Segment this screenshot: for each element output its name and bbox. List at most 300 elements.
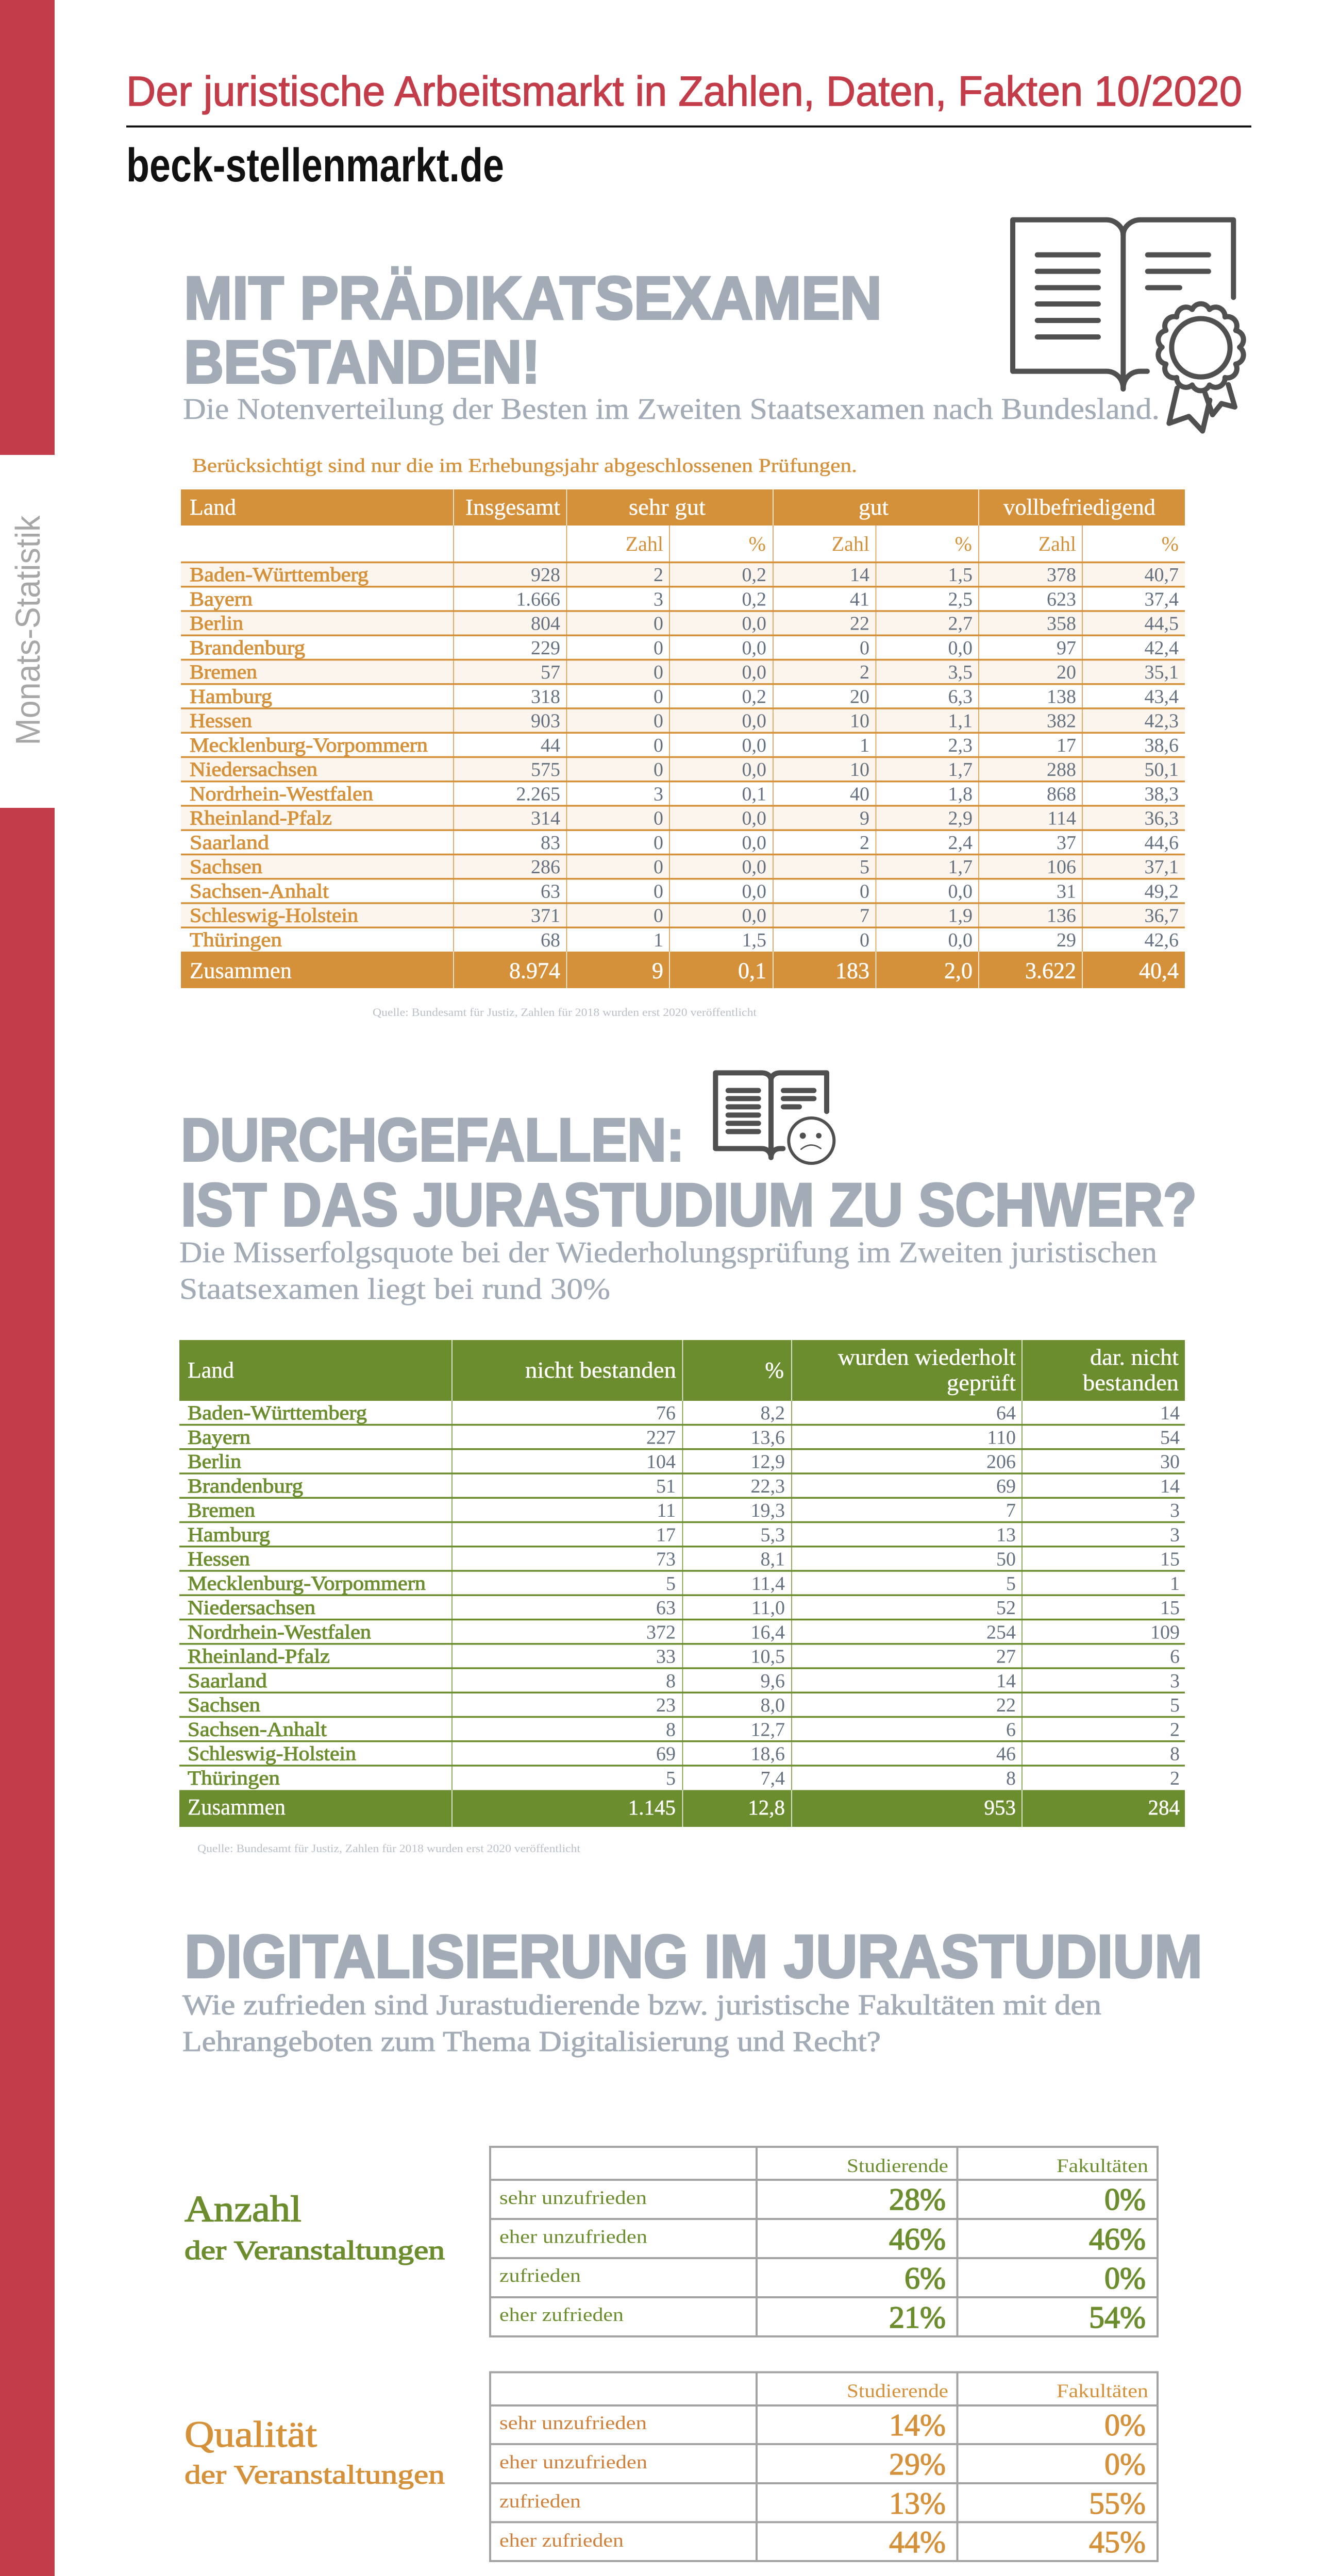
row: Rheinland-Pfalz: Rheinland-Pfalz xyxy=(190,807,332,829)
row: Hessen: 1,1 xyxy=(948,710,973,732)
row: Nordrhein-Westfalen: 16,4 xyxy=(750,1621,785,1643)
row: Bremen: 3,5 xyxy=(948,662,973,683)
panel: mit Prädikatsexamen bestanden xyxy=(181,220,1244,1019)
row: Bayern: 41 xyxy=(850,588,869,610)
row: Nordrhein-Westfalen xyxy=(188,1621,1180,1643)
row: Berlin: Berlin xyxy=(190,612,243,635)
table subheader: Zahl xyxy=(626,532,663,555)
row: Hamburg: 0 xyxy=(654,686,663,707)
row: Sachsen-Anhalt: 12,7 xyxy=(750,1719,785,1740)
row: Berlin: 44,5 xyxy=(1144,613,1179,635)
row: Hamburg: 20 xyxy=(850,686,869,707)
row: Baden-Württemberg: 378 xyxy=(1047,564,1076,586)
table subheader: % xyxy=(1162,532,1179,555)
row: Bremen: Bremen xyxy=(190,661,257,683)
row: Hamburg: Hamburg xyxy=(190,685,272,707)
row: Bayern: 227 xyxy=(646,1427,676,1448)
row: eher unzufrieden: 0% xyxy=(1104,2447,1146,2481)
row: Sachsen: 5 xyxy=(1170,1694,1180,1716)
row: Rheinland-Pfalz: 0,0 xyxy=(742,808,766,829)
row: zufrieden: 13% xyxy=(889,2486,946,2520)
row: Berlin: 358 xyxy=(1047,613,1076,635)
row: Thüringen: Thüringen xyxy=(188,1767,280,1789)
row: Nordrhein-Westfalen: 1,8 xyxy=(948,783,973,805)
total row: 40,4 xyxy=(1139,958,1179,983)
row: Mecklenburg-Vorpommern: 2,3 xyxy=(948,735,973,756)
row: Thüringen: 68 xyxy=(541,929,560,951)
row: Thüringen: 1 xyxy=(654,929,663,951)
total row xyxy=(179,1790,1185,1827)
row: Niedersachsen: 288 xyxy=(1047,759,1076,781)
row: Thüringen: Thüringen xyxy=(190,929,282,951)
row: Niedersachsen: 15 xyxy=(1160,1597,1180,1619)
row: Bremen: 19,3 xyxy=(750,1500,785,1521)
row: Hamburg: 138 xyxy=(1047,686,1076,707)
brand name: beck-stellenmarkt.de xyxy=(126,139,504,192)
row: Sachsen: 37,1 xyxy=(1144,856,1179,878)
row: Rheinland-Pfalz: 9 xyxy=(860,808,869,829)
row: Sachsen-Anhalt xyxy=(190,880,1179,902)
row: Sachsen-Anhalt: Sachsen-Anhalt xyxy=(188,1718,327,1740)
table subheader xyxy=(626,532,1179,555)
row: Brandenburg: 0,0 xyxy=(742,637,766,659)
row: Baden-Württemberg: 1,5 xyxy=(948,564,973,586)
row: Brandenburg: 0,0 xyxy=(948,637,973,659)
title: Der juristische Arbeitsmarkt in Zahlen, Daten, Fakten 10/2020 xyxy=(126,68,1242,115)
row: eher zufrieden xyxy=(499,2525,1146,2559)
table: Durchfallquote xyxy=(179,1340,1185,1827)
row: Bremen xyxy=(188,1499,1180,1521)
row: Hessen: Hessen xyxy=(188,1548,250,1570)
row: Saarland: Saarland xyxy=(188,1670,267,1692)
table: Anzahl: Fakultäten xyxy=(1057,2156,1148,2177)
row: Sachsen-Anhalt: 8 xyxy=(666,1719,676,1740)
subtitle: Wie zufrieden sind Jurastudierende bzw. juristische Fakultäten mit den xyxy=(182,1989,1101,2021)
row: Bremen: 0,0 xyxy=(742,662,766,683)
row: eher zufrieden: 45% xyxy=(1089,2525,1146,2559)
row: Baden-Württemberg: 40,7 xyxy=(1144,564,1179,586)
row: Berlin: 0,0 xyxy=(742,613,766,635)
row: Sachsen-Anhalt: 49,2 xyxy=(1144,880,1179,902)
row: Berlin: 206 xyxy=(986,1451,1016,1472)
row: Saarland: 83 xyxy=(541,832,560,854)
subtitle: Staatsexamen liegt bei rund 30% xyxy=(179,1272,610,1306)
total row: Zusammen xyxy=(190,958,292,983)
row: Schleswig-Holstein: 1,9 xyxy=(948,905,973,926)
row: Sachsen-Anhalt: 2 xyxy=(1170,1719,1180,1740)
row: Brandenburg: 42,4 xyxy=(1144,637,1179,659)
table header: gut xyxy=(859,495,889,520)
table header: dar. nicht xyxy=(1090,1345,1179,1370)
row: Rheinland-Pfalz: 0 xyxy=(654,808,663,829)
row: Rheinland-Pfalz: Rheinland-Pfalz xyxy=(188,1646,330,1667)
row: eher zufrieden: 21% xyxy=(889,2300,946,2334)
row: Sachsen: 8,0 xyxy=(761,1694,785,1716)
row: eher zufrieden: 54% xyxy=(1089,2300,1146,2334)
row: zufrieden xyxy=(499,2486,1146,2520)
row: Niedersachsen xyxy=(190,758,1179,781)
row: Niedersachsen: 0 xyxy=(654,759,663,781)
row: Nordrhein-Westfalen: 0,1 xyxy=(742,783,766,805)
row: Berlin: 104 xyxy=(646,1451,676,1472)
row: Schleswig-Holstein: 8 xyxy=(1170,1743,1180,1765)
row: Niedersachsen: 0,0 xyxy=(742,759,766,781)
row: Hessen xyxy=(190,710,1179,732)
row: Schleswig-Holstein: Schleswig-Holstein xyxy=(190,905,358,926)
row: eher unzufrieden: 29% xyxy=(889,2447,946,2481)
row: Rheinland-Pfalz: 27 xyxy=(996,1646,1016,1667)
table header: % xyxy=(765,1358,784,1383)
row: Brandenburg: 69 xyxy=(996,1476,1016,1497)
subtitle: Die Notenverteilung der Besten im Zweiten Staatsexamen nach Bundesland. xyxy=(183,392,1160,426)
row: eher zufrieden: eher zufrieden xyxy=(499,2304,624,2326)
heading: MIT PRÄDIKATSEXAMEN xyxy=(184,264,882,332)
row: Baden-Württemberg: 928 xyxy=(531,564,560,586)
row: Mecklenburg-Vorpommern xyxy=(190,734,1179,756)
row: Sachsen: 22 xyxy=(996,1694,1016,1716)
row: Bayern: 37,4 xyxy=(1144,588,1179,610)
row: Bayern: Bayern xyxy=(188,1426,250,1448)
row: Sachsen: 286 xyxy=(531,856,560,878)
row: Sachsen-Anhalt: 63 xyxy=(541,880,560,902)
row: Schleswig-Holstein xyxy=(190,905,1179,926)
row: Saarland xyxy=(188,1670,1180,1692)
table subheader: % xyxy=(955,532,972,555)
row: Sachsen xyxy=(190,856,1179,878)
row: Bayern: 0,2 xyxy=(742,588,766,610)
row: Nordrhein-Westfalen: 868 xyxy=(1047,783,1076,805)
row: Brandenburg: 97 xyxy=(1057,637,1076,659)
table header xyxy=(181,489,1185,526)
table header: Insgesamt xyxy=(465,495,560,520)
row: Mecklenburg-Vorpommern: 1 xyxy=(860,735,869,756)
row: Nordrhein-Westfalen: 3 xyxy=(654,783,663,805)
row: Mecklenburg-Vorpommern: Mecklenburg-Vorpommern xyxy=(188,1572,426,1595)
row: Baden-Württemberg: 2 xyxy=(654,564,663,586)
row: Sachsen-Anhalt: 0 xyxy=(860,880,869,902)
heading: IST DAS JURASTUDIUM ZU SCHWER? xyxy=(181,1171,1197,1239)
row: Bremen: 20 xyxy=(1057,662,1076,683)
row: Schleswig-Holstein: Schleswig-Holstein xyxy=(188,1742,356,1765)
row: Hessen xyxy=(188,1548,1180,1570)
total row: 0,1 xyxy=(738,958,766,983)
row: Hessen: 42,3 xyxy=(1144,710,1179,732)
row: eher unzufrieden xyxy=(499,2222,1146,2256)
row: sehr unzufrieden xyxy=(499,2408,1146,2442)
row: Niedersachsen: 50,1 xyxy=(1144,759,1179,781)
row: Brandenburg: 229 xyxy=(531,637,560,659)
row: Niedersachsen: Niedersachsen xyxy=(190,758,317,781)
table header: vollbefriedigend xyxy=(1003,495,1155,520)
row: Niedersachsen xyxy=(188,1597,1180,1619)
table header: nicht bestanden xyxy=(525,1358,676,1383)
table subheader: Zahl xyxy=(1038,532,1076,555)
row: Bremen xyxy=(190,661,1179,683)
row: Thüringen: 0 xyxy=(860,929,869,951)
row: Hessen: 903 xyxy=(531,710,560,732)
row: Hamburg: 0,2 xyxy=(742,686,766,707)
row: Bremen: Bremen xyxy=(188,1499,255,1521)
table: Notenverteilung xyxy=(181,489,1185,988)
row: Saarland: 9,6 xyxy=(761,1670,785,1692)
row: Baden-Württemberg: 76 xyxy=(656,1402,676,1424)
row: Berlin: 30 xyxy=(1160,1451,1180,1472)
subtitle xyxy=(182,1989,1101,2058)
row: sehr unzufrieden: 28% xyxy=(889,2182,946,2216)
row: Baden-Württemberg: 14 xyxy=(1160,1402,1180,1424)
row: Brandenburg xyxy=(190,637,1179,659)
row: eher zufrieden: 44% xyxy=(889,2525,946,2559)
row: Thüringen: 8 xyxy=(1006,1768,1016,1789)
row: Saarland: 8 xyxy=(666,1670,676,1692)
row: Mecklenburg-Vorpommern: 1 xyxy=(1170,1573,1180,1595)
row: Nordrhein-Westfalen: 254 xyxy=(986,1621,1016,1643)
row: Hamburg: 5,3 xyxy=(761,1524,785,1546)
row: Brandenburg xyxy=(188,1475,1180,1497)
row: Thüringen xyxy=(190,929,1179,951)
row: zufrieden: zufrieden xyxy=(499,2491,581,2512)
table subheader: Zahl xyxy=(832,532,869,555)
total row: 3.622 xyxy=(1025,958,1076,983)
panel: Digitalisierung im Jurastudium xyxy=(182,1923,1247,2576)
subtitle: Lehrangeboten zum Thema Digitalisierung und Recht? xyxy=(182,2026,881,2058)
row: Bremen: 35,1 xyxy=(1144,662,1179,683)
row: Hessen: 0 xyxy=(654,710,663,732)
row: Saarland: 14 xyxy=(996,1670,1016,1692)
row: eher unzufrieden: 46% xyxy=(1089,2222,1146,2256)
row: Hessen: Hessen xyxy=(190,710,252,732)
row: Baden-Württemberg: 14 xyxy=(850,564,869,586)
row: Baden-Württemberg: 8,2 xyxy=(761,1402,785,1424)
row: sehr unzufrieden: sehr unzufrieden xyxy=(499,2188,647,2209)
row: Schleswig-Holstein: 36,7 xyxy=(1144,905,1179,926)
row: Rheinland-Pfalz: 10,5 xyxy=(750,1646,785,1667)
row: Sachsen: 5 xyxy=(860,856,869,878)
row: Nordrhein-Westfalen: Nordrhein-Westfalen xyxy=(188,1621,371,1643)
row: Thüringen: 1,5 xyxy=(742,929,766,951)
label: Qualität der Veranstaltungen: der Veranstaltungen xyxy=(185,2461,445,2489)
heading: DURCHGEFALLEN: xyxy=(181,1106,684,1174)
label: Anzahl der Veranstaltungen xyxy=(185,2189,445,2265)
table: Qualität: Studierende xyxy=(847,2381,948,2402)
row: Sachsen: 0 xyxy=(654,856,663,878)
row: Thüringen: 29 xyxy=(1057,929,1076,951)
table: Qualität: Fakultäten xyxy=(1057,2381,1148,2402)
row: Hessen: 73 xyxy=(656,1549,676,1570)
row: Berlin: 804 xyxy=(531,613,560,635)
row: Brandenburg: 51 xyxy=(656,1476,676,1497)
label: Anzahl der Veranstaltungen: der Veranstaltungen xyxy=(185,2236,445,2265)
row: Bremen: 0 xyxy=(654,662,663,683)
row: Bayern: 623 xyxy=(1047,588,1076,610)
row: Bremen: 7 xyxy=(1006,1500,1016,1521)
total row: 953 xyxy=(984,1795,1016,1819)
table: Anzahl xyxy=(490,2147,1158,2336)
row: Hessen: 15 xyxy=(1160,1549,1180,1570)
table header: Land xyxy=(190,495,236,520)
row: Bayern: 2,5 xyxy=(948,588,973,610)
heading xyxy=(181,1106,1197,1239)
row: Hessen: 382 xyxy=(1047,710,1076,732)
heading: BESTANDEN! xyxy=(184,328,540,396)
row: Schleswig-Holstein xyxy=(188,1742,1180,1765)
row: Bremen: 57 xyxy=(541,662,560,683)
heading xyxy=(184,264,882,396)
row: Rheinland-Pfalz: 36,3 xyxy=(1144,808,1179,829)
row: zufrieden: 55% xyxy=(1089,2486,1146,2520)
row: Bremen: 11 xyxy=(657,1500,676,1521)
total row: 284 xyxy=(1148,1795,1180,1819)
row: Hessen: 0,0 xyxy=(742,710,766,732)
row: Mecklenburg-Vorpommern: 0,0 xyxy=(742,735,766,756)
row: Rheinland-Pfalz: 33 xyxy=(656,1646,676,1667)
row: Bayern xyxy=(190,588,1179,610)
icon: book with rosette xyxy=(1013,220,1244,431)
row: Hamburg xyxy=(190,685,1179,707)
row: Rheinland-Pfalz xyxy=(190,807,1179,829)
row: Schleswig-Holstein: 0,0 xyxy=(742,905,766,926)
row: Schleswig-Holstein: 18,6 xyxy=(750,1743,785,1765)
row: zufrieden xyxy=(499,2261,1146,2295)
row: Bayern: Bayern xyxy=(190,588,253,610)
row: Niedersachsen: 10 xyxy=(850,759,869,781)
subtitle: Die Misserfolgsquote bei der Wiederholungsprüfung im Zweiten juristischen xyxy=(179,1235,1157,1269)
row: Sachsen-Anhalt xyxy=(188,1718,1180,1740)
row: Mecklenburg-Vorpommern: 11,4 xyxy=(751,1573,785,1595)
row: eher unzufrieden xyxy=(499,2447,1146,2481)
row: sehr unzufrieden: 14% xyxy=(889,2408,946,2442)
row: Schleswig-Holstein: 7 xyxy=(860,905,869,926)
row: Rheinland-Pfalz xyxy=(188,1646,1180,1667)
total row: 2,0 xyxy=(944,958,973,983)
row: Mecklenburg-Vorpommern xyxy=(188,1572,1180,1595)
row: Brandenburg: Brandenburg xyxy=(188,1475,303,1497)
row: Niedersachsen: 1,7 xyxy=(948,759,973,781)
row: sehr unzufrieden: 0% xyxy=(1104,2408,1146,2442)
total row: 1.145 xyxy=(628,1795,676,1819)
row: Brandenburg: 14 xyxy=(1160,1476,1180,1497)
row: sehr unzufrieden xyxy=(499,2182,1146,2216)
row: Sachsen-Anhalt: 6 xyxy=(1006,1719,1016,1740)
row: Berlin: 22 xyxy=(850,613,869,635)
row: Bremen: 2 xyxy=(860,662,869,683)
row: Niedersachsen: 575 xyxy=(531,759,560,781)
total row: 12,8 xyxy=(748,1795,785,1819)
total row: Zusammen xyxy=(188,1794,286,1820)
row: eher zufrieden: eher zufrieden xyxy=(499,2530,624,2551)
row: Saarland: 44,6 xyxy=(1144,832,1179,854)
row: Hamburg: 17 xyxy=(656,1524,676,1546)
row: Sachsen: 0,0 xyxy=(742,856,766,878)
row: Berlin: 12,9 xyxy=(750,1451,785,1472)
row: Sachsen: Sachsen xyxy=(190,856,262,878)
table: Anzahl: Studierende xyxy=(847,2156,948,2177)
row: Saarland xyxy=(190,832,1179,854)
row: Hamburg xyxy=(188,1523,1180,1546)
row: Schleswig-Holstein: 46 xyxy=(996,1743,1016,1765)
row: Nordrhein-Westfalen: 40 xyxy=(850,783,869,805)
row: Hessen: 10 xyxy=(850,710,869,732)
row: Bayern: 3 xyxy=(654,588,663,610)
row: Hamburg: 3 xyxy=(1170,1524,1180,1546)
row: Thüringen: 7,4 xyxy=(761,1768,785,1789)
row: Niedersachsen: 52 xyxy=(996,1597,1016,1619)
row: Hamburg: 43,4 xyxy=(1144,686,1179,707)
row: Mecklenburg-Vorpommern: 17 xyxy=(1057,735,1076,756)
row: Mecklenburg-Vorpommern: 44 xyxy=(541,735,560,756)
table header: geprüft xyxy=(947,1370,1016,1395)
row: Thüringen xyxy=(188,1767,1180,1789)
row: Sachsen: 23 xyxy=(656,1694,676,1716)
row: Bayern: 110 xyxy=(987,1427,1016,1448)
panel: durchgefallen xyxy=(179,1073,1197,1855)
table: Qualität xyxy=(490,2372,1158,2561)
label: Anzahl der Veranstaltungen: Anzahl xyxy=(185,2189,301,2230)
row: Sachsen-Anhalt: 0,0 xyxy=(742,880,766,902)
row: Sachsen-Anhalt: 0 xyxy=(654,880,663,902)
row: Sachsen-Anhalt: Sachsen-Anhalt xyxy=(190,880,329,902)
row: Bayern: 54 xyxy=(1160,1427,1180,1448)
row: Saarland: 0 xyxy=(654,832,663,854)
row: Nordrhein-Westfalen: 2.265 xyxy=(516,783,560,805)
row: Berlin: 2,7 xyxy=(948,613,973,635)
row: Sachsen: Sachsen xyxy=(188,1694,260,1716)
row: Sachsen-Anhalt: 0,0 xyxy=(948,880,973,902)
row: Baden-Württemberg: 0,2 xyxy=(742,564,766,586)
total row: 8.974 xyxy=(509,958,560,983)
table header: Land xyxy=(188,1358,234,1383)
row: Saarland: 3 xyxy=(1170,1670,1180,1692)
row: Rheinland-Pfalz: 2,9 xyxy=(948,808,973,829)
row: Baden-Württemberg: Baden-Württemberg xyxy=(188,1402,367,1424)
subtitle xyxy=(179,1235,1157,1306)
row: Saarland: 0,0 xyxy=(742,832,766,854)
total row xyxy=(181,952,1185,988)
icon: book with sad face xyxy=(715,1073,834,1163)
row: Schleswig-Holstein: 136 xyxy=(1047,905,1076,926)
row: eher unzufrieden: 46% xyxy=(889,2222,946,2256)
row: Sachsen: 1,7 xyxy=(948,856,973,878)
heading: DIGITALISIERUNG IM JURASTUDIUM xyxy=(185,1923,1202,1991)
row: Niedersachsen: 63 xyxy=(656,1597,676,1619)
row: Hessen: 50 xyxy=(996,1549,1016,1570)
row: Hessen: 8,1 xyxy=(761,1549,785,1570)
row: zufrieden: zufrieden xyxy=(499,2265,581,2286)
row: Saarland: Saarland xyxy=(190,832,270,854)
row: Thüringen: 42,6 xyxy=(1144,929,1179,951)
row: Brandenburg: 0 xyxy=(860,637,869,659)
row: Berlin xyxy=(190,612,1179,635)
row: Bayern: 13,6 xyxy=(750,1427,785,1448)
source note: Quelle: Bundesamt für Justiz, Zahlen für 2018 wurden erst 2020 veröffentlicht xyxy=(373,1006,757,1019)
row: Mecklenburg-Vorpommern: 38,6 xyxy=(1144,735,1179,756)
row: sehr unzufrieden: 0% xyxy=(1104,2182,1146,2216)
row: Berlin xyxy=(188,1451,1180,1472)
row: eher unzufrieden: eher unzufrieden xyxy=(499,2227,647,2247)
row: Thüringen: 2 xyxy=(1170,1768,1180,1789)
page header xyxy=(126,68,1251,192)
row: eher zufrieden xyxy=(499,2300,1146,2334)
row: zufrieden: 0% xyxy=(1104,2261,1146,2295)
row: Brandenburg: 0 xyxy=(654,637,663,659)
row: Nordrhein-Westfalen: Nordrhein-Westfalen xyxy=(190,783,373,805)
row: Rheinland-Pfalz: 314 xyxy=(531,808,560,829)
sidebar label: Monats-Statistik xyxy=(9,515,47,745)
row: Nordrhein-Westfalen: 372 xyxy=(646,1621,676,1643)
row: Mecklenburg-Vorpommern: 5 xyxy=(1006,1573,1016,1595)
row: Sachsen xyxy=(188,1694,1180,1716)
row: Nordrhein-Westfalen xyxy=(190,783,1179,805)
